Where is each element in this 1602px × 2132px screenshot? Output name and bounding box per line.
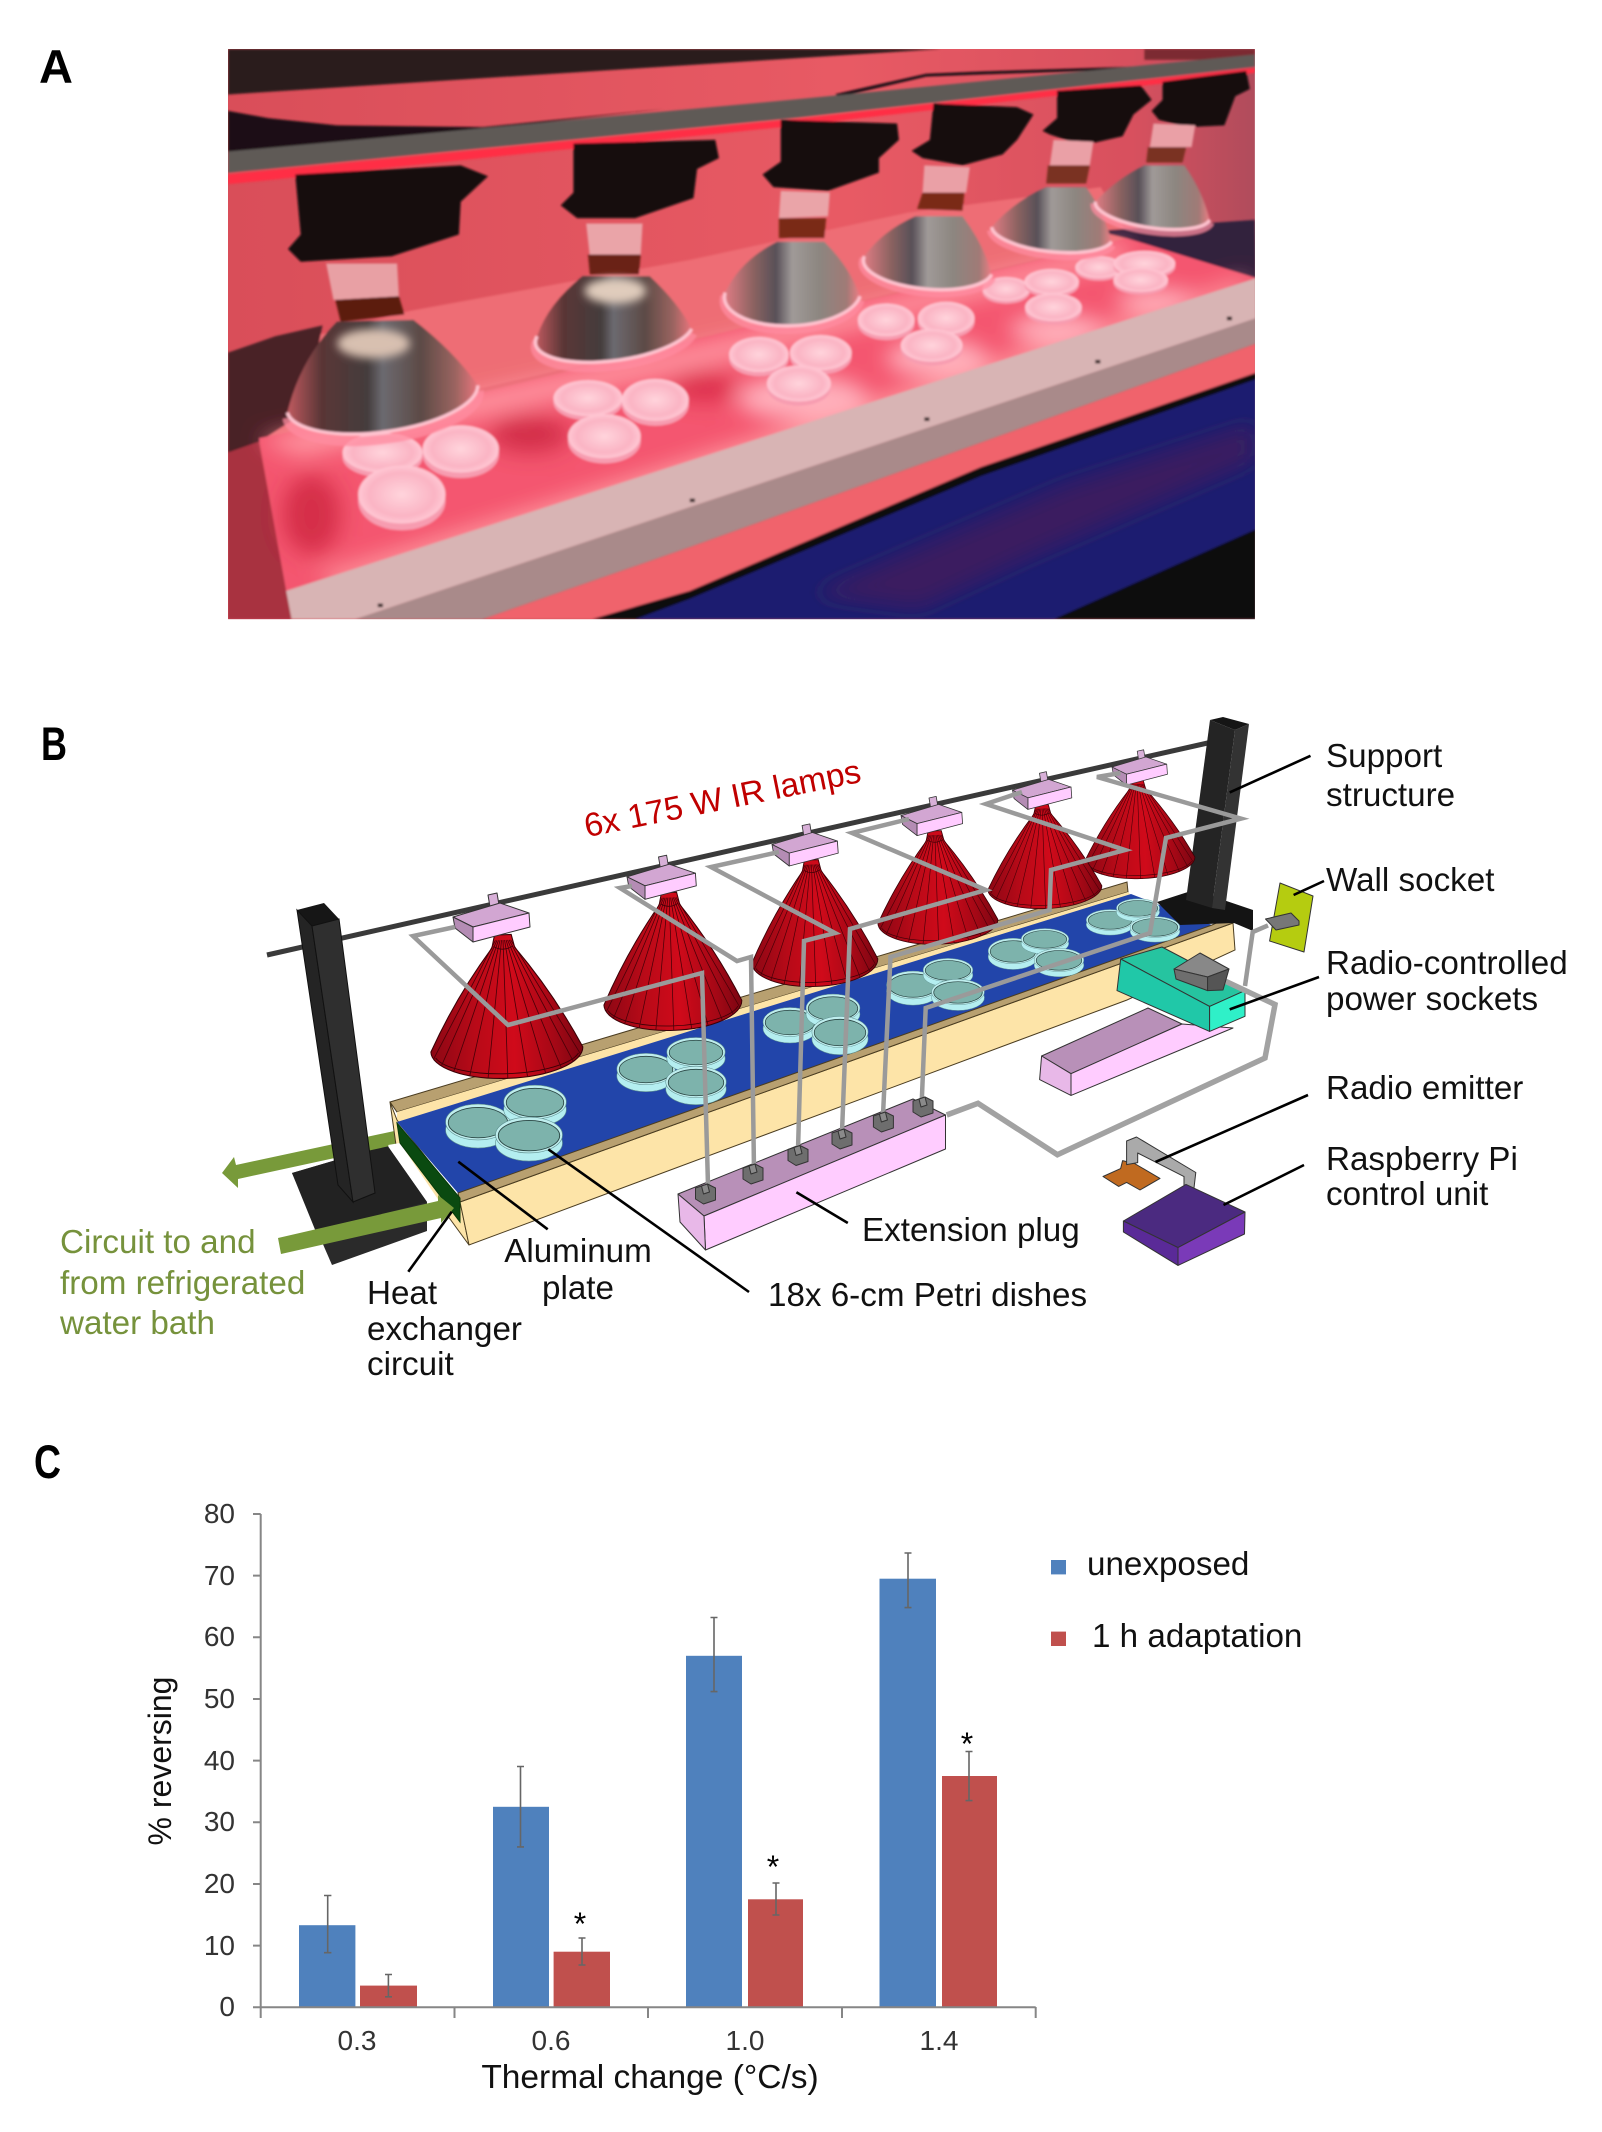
photo: navy panel (635, 379, 1256, 619)
petri dishes group 5 (988, 929, 1084, 977)
photo: front face upper (286, 278, 1256, 619)
lamp 6 cone (1082, 778, 1196, 881)
photo: pink reflection (483, 344, 1256, 619)
photo: lamp 2 (535, 140, 719, 367)
photo: lamp 4 (863, 104, 1033, 293)
lamp 2 cone (600, 890, 743, 1033)
rod (267, 740, 1221, 955)
panel label B: B (41, 717, 67, 770)
photo: plate (259, 238, 1256, 591)
lamp 3 cone (748, 858, 879, 989)
significance stars (574, 1726, 973, 1942)
panel C: bar chart (142, 1498, 1302, 2096)
label: aluminum plate: Aluminum (504, 1233, 652, 1270)
right post base (1157, 890, 1253, 931)
significance stars: * (574, 1906, 586, 1942)
photo: lamp 3 (724, 120, 899, 329)
label: Raspberry Pi control unit: Raspberry Pi (1326, 1141, 1518, 1178)
label: radio emitter: Radio emitter (1326, 1070, 1523, 1107)
lamp holder 3 (772, 824, 838, 866)
plug connectors (696, 1097, 933, 1204)
y-axis labels: 50 (204, 1683, 235, 1714)
lower green arrow: circuit inflow (278, 1195, 454, 1254)
photo: lamp 5 (992, 85, 1152, 256)
y-axis labels (204, 1498, 235, 2022)
photo: cables (228, 64, 1235, 158)
label: heat exchanger circuit: Heat (367, 1275, 437, 1312)
lamp wires (413, 773, 1241, 1185)
wall socket (1266, 883, 1313, 952)
legend (1051, 1546, 1302, 1655)
left post base (292, 1145, 427, 1265)
photo: lamp 6 (1095, 71, 1250, 232)
emitter bracket (1127, 1137, 1196, 1188)
y-axis title: % reversing (142, 1677, 178, 1845)
table far inner wall (397, 892, 1131, 1125)
photo: plate highlights (259, 242, 1246, 587)
lamp 1 cone (427, 932, 584, 1081)
y-axis labels: 80 (204, 1498, 235, 1529)
photo: blurred scene (228, 49, 1256, 619)
table near side wall (460, 923, 1235, 1245)
axes and ticks (253, 1514, 1036, 2018)
y-axis labels: 30 (204, 1806, 235, 1837)
bars: 1 h adaptation (360, 1776, 997, 2007)
label: radio-controlled power sockets: Radio-controlled (1326, 945, 1568, 982)
x-axis title: Thermal change (°C/s) (481, 2059, 819, 2096)
leader lines (408, 756, 1324, 1292)
label: circuit to and from refrigerated water bath: water bath (59, 1305, 215, 1342)
lamp holder 1 (453, 893, 530, 942)
photo: black gap (483, 372, 1255, 620)
lamp holder 6 (1112, 750, 1167, 785)
photo: pole glow (228, 68, 1255, 184)
photo: pole (228, 54, 1255, 173)
legend: unexposed (1087, 1546, 1249, 1583)
photo: keyboard area (228, 442, 292, 619)
table far rim (390, 882, 1128, 1112)
heat exchanger circuit (397, 1123, 460, 1222)
label: heat exchanger circuit: exchanger (367, 1311, 522, 1348)
photo: lamp 1 (287, 165, 488, 441)
label: petri dishes: 18x 6-cm Petri dishes (768, 1277, 1087, 1314)
label: radio-controlled power sockets: power sockets (1326, 981, 1538, 1018)
x-axis labels (338, 2025, 958, 2056)
panel label C: C (34, 1435, 61, 1488)
label: aluminum plate: plate (542, 1270, 614, 1307)
photo: purple sheen (810, 424, 1255, 609)
second extension plug (1040, 1008, 1233, 1095)
y-axis labels: 60 (204, 1621, 235, 1652)
panel A: photograph of the lamp rig (228, 49, 1256, 619)
photo: dark objects left (228, 325, 323, 453)
photo: screws (378, 317, 1232, 607)
label: extension plug: Extension plug (862, 1212, 1080, 1249)
aluminum plate (397, 894, 1212, 1193)
x-axis labels: 1.0 (726, 2025, 764, 2056)
extension plug (678, 1099, 946, 1250)
lamp 4 cone (875, 829, 999, 946)
label: 6x 175 W IR lamps: 6x 175 W IR lamps (581, 753, 864, 845)
panel B: 3D schematic (59, 717, 1568, 1383)
photo: front face lower (355, 318, 1256, 619)
x-axis labels: 0.6 (532, 2025, 570, 2056)
upper green arrow: circuit outflow (222, 1130, 399, 1188)
photo: dark right background (1097, 220, 1256, 278)
error bars (324, 1553, 972, 1997)
x-axis labels: 1.4 (920, 2025, 958, 2056)
x-axis labels: 0.3 (338, 2025, 376, 2056)
significance stars: * (767, 1849, 779, 1885)
label: circuit to and from refrigerated water bath: Circuit to and (60, 1224, 256, 1261)
lamp holder 5 (1012, 772, 1072, 809)
petri dishes group 1 (446, 1085, 566, 1161)
label: support structure: structure (1326, 777, 1455, 814)
label: heat exchanger circuit: circuit (367, 1346, 454, 1383)
control cable (947, 981, 1275, 1155)
y-axis labels: 20 (204, 1868, 235, 1899)
radio emitter (1103, 1161, 1160, 1190)
radio-controlled power sockets (1117, 947, 1245, 1031)
petri dishes group 3 (763, 994, 868, 1055)
y-axis labels: 40 (204, 1745, 235, 1776)
label: support structure: Support (1326, 738, 1442, 775)
significance stars: * (961, 1726, 973, 1762)
photo: back wall (228, 49, 1255, 619)
lamp holder 2 (627, 855, 696, 899)
right support post (1186, 717, 1249, 910)
petri dishes group 6 (1086, 899, 1180, 942)
y-axis labels: 70 (204, 1560, 235, 1591)
label: wall socket: Wall socket (1326, 862, 1494, 899)
lamp 5 cone (985, 803, 1103, 911)
legend: 1 h adaptation (1092, 1618, 1302, 1655)
white gap (388, 1143, 450, 1220)
label: Raspberry Pi control unit: control unit (1326, 1176, 1488, 1213)
table end face (390, 1102, 469, 1245)
petri dishes group 4 (887, 958, 984, 1010)
cable to wall socket (1245, 925, 1268, 986)
y-axis labels: 0 (219, 1991, 235, 2022)
y-axis labels: 10 (204, 1930, 235, 1961)
table near rim (458, 915, 1233, 1202)
photo: dark corner top right (1144, 49, 1255, 60)
photo: petri dishes (343, 251, 1175, 530)
photo: shelf behind lamps (259, 187, 1130, 440)
lamp holder 4 (901, 796, 963, 836)
petri dishes group 2 (617, 1038, 726, 1105)
socket plug block (1174, 953, 1229, 991)
panel label A: A (39, 40, 73, 93)
bars: unexposed (299, 1579, 936, 2007)
photo: dark upper band (228, 49, 941, 94)
left support post (297, 903, 375, 1202)
label: circuit to and from refrigerated water bath: from refrigerated (60, 1265, 305, 1302)
Raspberry Pi control unit (1123, 1184, 1245, 1265)
